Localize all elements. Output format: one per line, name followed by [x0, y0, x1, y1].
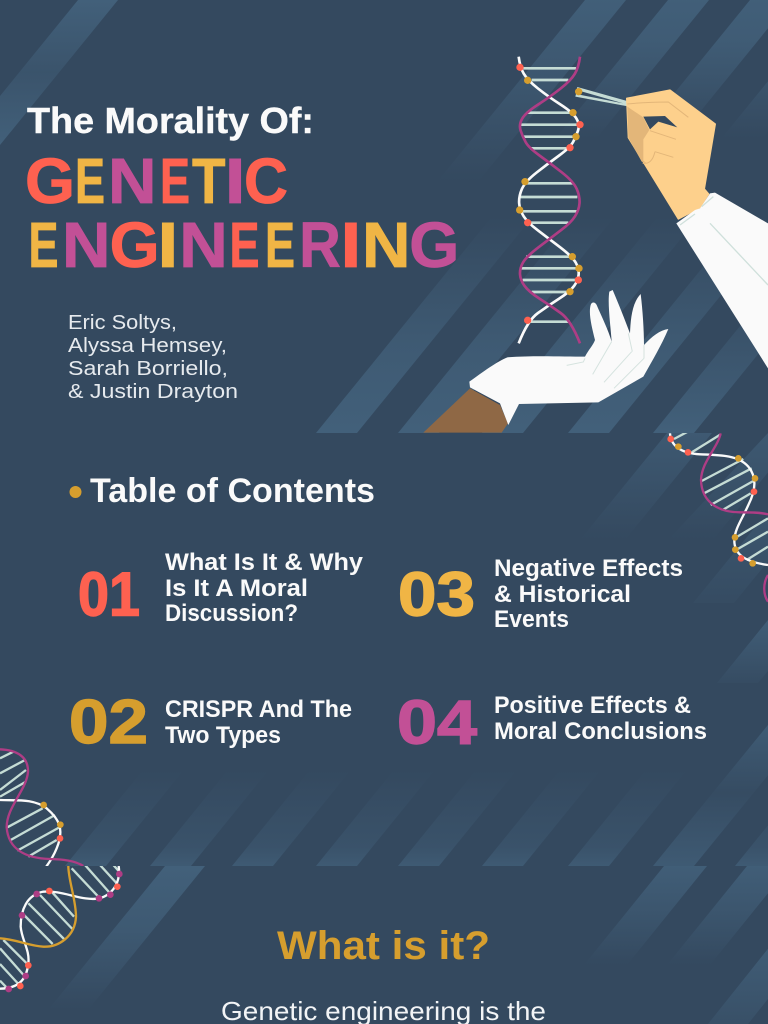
heading: ENGINEERING: N	[362, 209, 410, 281]
heading: What is it?: What is it?	[277, 924, 490, 968]
item 01: 01	[78, 560, 140, 630]
heading: Table of Contents: Table of Contents	[90, 472, 375, 510]
bullet	[70, 486, 82, 498]
heading: ENGINEERING	[28, 209, 459, 281]
heading: ENGINEERING: N	[179, 209, 228, 281]
heading: ENGINEERING: E	[28, 209, 58, 281]
heading: ENGINEERING: E	[265, 209, 295, 281]
DNA strand: upper right	[667, 423, 768, 602]
heading: ENGINEERING: N	[62, 209, 110, 281]
heading: GENETIC	[25, 145, 288, 217]
icon: hand holding tweezers	[627, 90, 715, 219]
item 03: Events	[494, 606, 569, 633]
item 02: CRISPR And The	[165, 696, 352, 723]
DNA helix	[516, 57, 584, 343]
title: The Morality Of: The Morality Of:	[27, 100, 314, 141]
heading: GENETIC: E	[160, 145, 190, 217]
item 04: Moral Conclusions	[494, 718, 707, 745]
item 03: 03	[398, 560, 475, 630]
icon: lab coat sleeve	[676, 193, 768, 368]
heading: GENETIC: G	[25, 145, 75, 217]
item 04	[397, 688, 707, 758]
authors: Eric Soltys,	[68, 312, 177, 334]
heading: GENETIC: C	[244, 145, 288, 217]
authors: Alyssa Hemsey,	[68, 335, 227, 357]
heading: GENETIC: T	[192, 145, 226, 217]
item 01: What Is It & Why	[165, 549, 364, 576]
heading: GENETIC: N	[108, 145, 156, 217]
heading: ENGINEERING: G	[409, 209, 459, 281]
item 03	[398, 555, 683, 633]
illustration: DNA and hands	[423, 57, 768, 433]
heading: ENGINEERING: E	[230, 209, 260, 281]
item 02: Two Types	[165, 722, 281, 749]
item 04: 04	[397, 688, 478, 758]
authors	[68, 312, 238, 403]
DNA strand: left lower	[0, 865, 123, 992]
item 01: Discussion?	[165, 600, 298, 627]
heading: GENETIC: I	[225, 145, 246, 217]
heading: ENGINEERING: G	[110, 209, 160, 281]
heading: ENGINEERING: R	[299, 209, 341, 281]
heading: ENGINEERING: I	[340, 209, 361, 281]
item 01	[78, 549, 364, 630]
icon: tweezers	[575, 87, 631, 106]
heading: GENETIC: E	[75, 145, 105, 217]
authors: & Justin Drayton	[68, 381, 238, 403]
icon: gloved open hand	[469, 290, 668, 425]
item 03: Negative Effects	[494, 555, 683, 582]
DNA strand: left upper	[0, 749, 83, 868]
authors: Sarah Borriello,	[68, 358, 228, 380]
item 01: Is It A Moral	[165, 575, 308, 602]
item 02	[69, 688, 352, 757]
item 02: 02	[69, 688, 148, 757]
icon: brown forearm	[423, 388, 508, 433]
heading: ENGINEERING: I	[157, 209, 178, 281]
item 03: & Historical	[494, 581, 631, 608]
item 04: Positive Effects &	[494, 692, 691, 719]
